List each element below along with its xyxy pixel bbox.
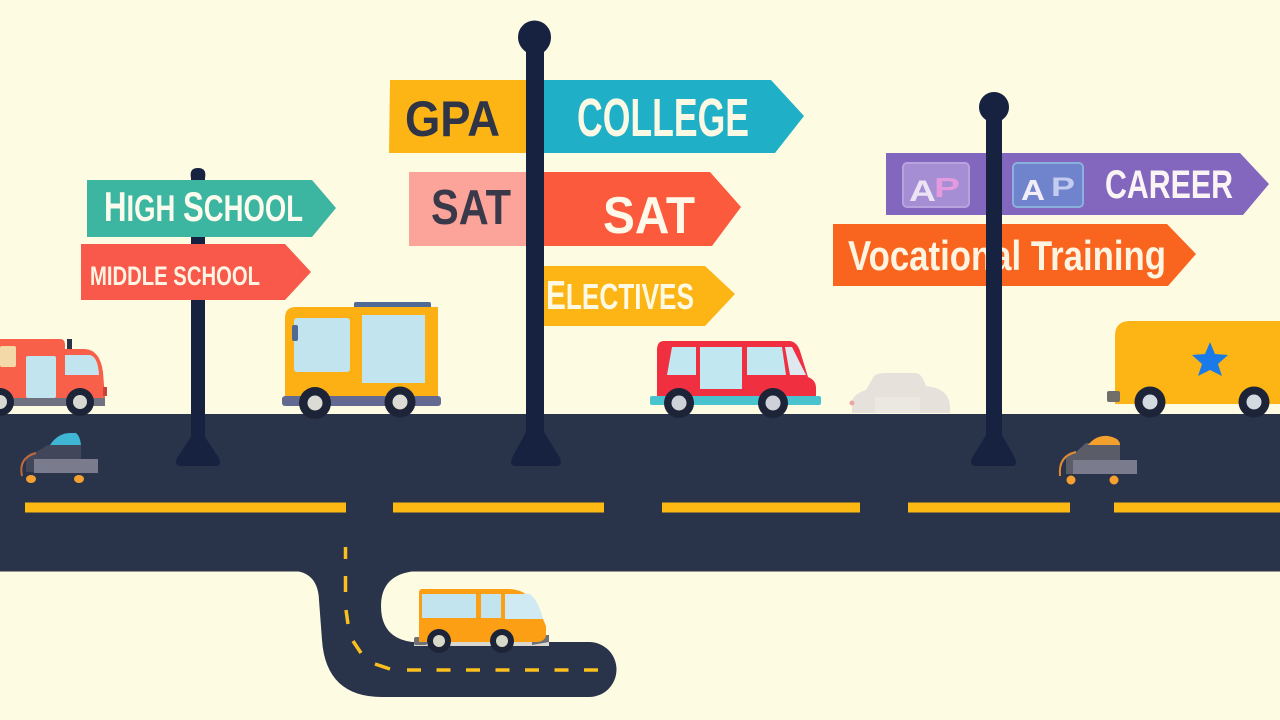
sign: middle school: MIDDLE SCHOOL xyxy=(90,261,260,291)
sign: sat right: SAT xyxy=(603,187,695,245)
road centre line xyxy=(25,502,1280,512)
sign: vocational training: Vocational Training xyxy=(848,232,1166,279)
sign: gpa: GPA xyxy=(405,91,500,147)
icon: ap badge two: A xyxy=(1021,175,1045,207)
sign: career: CAREER xyxy=(1105,163,1233,207)
left signpost xyxy=(81,168,336,466)
sign: high school: HIGH SCHOOL xyxy=(104,183,303,230)
sign: career xyxy=(886,153,1269,215)
sign: sat left: SAT xyxy=(431,181,511,235)
post: centre xyxy=(511,20,561,466)
sign: sat left xyxy=(409,172,526,246)
exit road xyxy=(296,571,616,697)
vehicle: yellow truck xyxy=(1107,321,1280,418)
post: left xyxy=(176,168,220,466)
icon: ap badge one: P xyxy=(934,172,960,203)
vehicle: red truck xyxy=(0,339,107,416)
exit road dashes xyxy=(346,547,601,670)
icon: ap badge two xyxy=(1013,163,1083,207)
post: right xyxy=(971,92,1016,466)
sign: gpa xyxy=(389,80,526,153)
vehicle: small car left xyxy=(21,433,98,483)
sign: electives: ELECTIVES xyxy=(546,272,694,318)
vehicle: red van xyxy=(650,341,821,418)
sign: college xyxy=(544,80,804,153)
main road xyxy=(0,414,1280,572)
icon: ap badge one: A xyxy=(909,175,936,208)
icon: blue star xyxy=(1192,342,1228,376)
vehicle: small bus on exit road xyxy=(414,589,549,653)
icon: ap badge two: P xyxy=(1051,172,1075,202)
sign: vocational training xyxy=(833,224,1196,286)
vehicle: small car right xyxy=(1060,436,1137,484)
sign: college: COLLEGE xyxy=(577,88,749,148)
vehicle: yellow bus xyxy=(282,302,441,419)
sign: middle school xyxy=(81,244,311,300)
sign: sat right xyxy=(544,172,741,246)
vehicle: faded car xyxy=(850,373,950,413)
icon: ap badge one xyxy=(903,163,969,208)
